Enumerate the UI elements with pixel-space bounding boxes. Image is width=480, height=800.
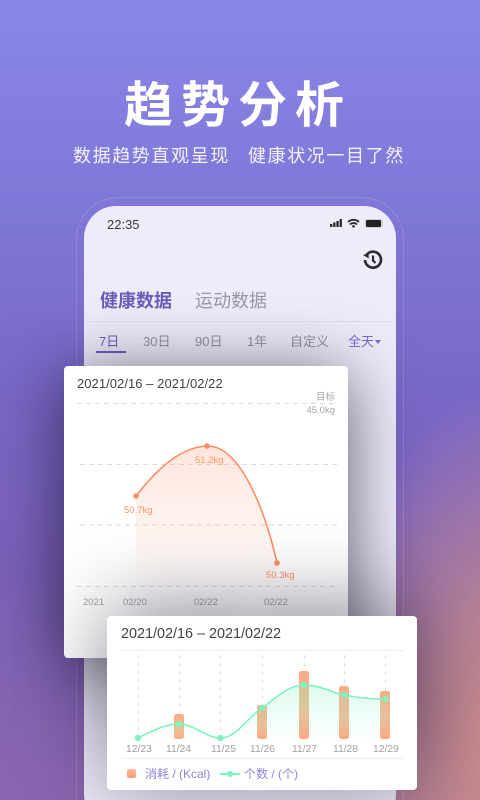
x-axis labels: 11/28 <box>333 744 358 755</box>
x-axis labels: 02/22 <box>194 597 218 608</box>
x-axis labels <box>126 744 399 755</box>
panel: calories chart card <box>107 616 417 790</box>
range tabs <box>99 334 381 349</box>
x-axis labels: 11/26 <box>250 744 275 755</box>
range tabs: 自定义 <box>290 334 329 349</box>
icon: history clock <box>363 250 382 270</box>
range tabs: 90日 <box>195 334 222 349</box>
active tab underline <box>96 351 126 353</box>
value labels <box>124 455 295 581</box>
target label: 目标 <box>316 392 335 403</box>
subtitle: 数据趋势直观呈现 <box>73 146 230 166</box>
phone outer frame <box>76 197 404 800</box>
combo chart <box>121 650 404 759</box>
x-axis labels: 2021 <box>83 597 104 608</box>
x-axis labels: 02/22 <box>264 597 288 608</box>
tab: health data: 健康数据 <box>100 291 172 311</box>
legend <box>127 767 298 781</box>
target label: 45.0kg <box>306 405 335 416</box>
x-axis labels: 11/25 <box>211 744 236 755</box>
legend: 消耗 / (Kcal) <box>145 767 210 781</box>
x-axis labels: 11/27 <box>292 744 317 755</box>
phone screen <box>84 206 396 800</box>
legend: 个数 / (个) <box>244 767 298 781</box>
range tabs: 7日 <box>99 334 119 349</box>
value labels: 51.2kg <box>195 455 224 466</box>
target label <box>306 392 335 416</box>
value labels: 50.3kg <box>266 570 295 581</box>
weight line chart <box>77 403 337 587</box>
card heading: 2021/02/16 – 2021/02/22 <box>121 626 281 642</box>
tab: sport data: 运动数据 <box>195 291 267 311</box>
status bar time: 22:35 <box>107 217 140 232</box>
divider <box>84 321 396 322</box>
panel: weight chart card <box>64 366 348 658</box>
range tabs: 1年 <box>247 334 267 349</box>
card heading: 2021/02/16 – 2021/02/22 <box>77 376 223 391</box>
value labels: 50.7kg <box>124 505 153 516</box>
range tabs: 全天 <box>348 334 374 349</box>
range tabs: 30日 <box>143 334 170 349</box>
status bar icons <box>330 218 383 228</box>
x-axis labels <box>83 597 288 608</box>
x-axis labels: 12/23 <box>126 744 152 755</box>
x-axis labels: 11/24 <box>166 744 191 755</box>
x-axis labels: 02/20 <box>123 597 147 608</box>
subtitle <box>73 146 405 166</box>
title: 趋势分析 <box>124 79 352 133</box>
x-axis labels: 12/29 <box>373 744 399 755</box>
subtitle: 健康状况一目了然 <box>248 146 405 166</box>
